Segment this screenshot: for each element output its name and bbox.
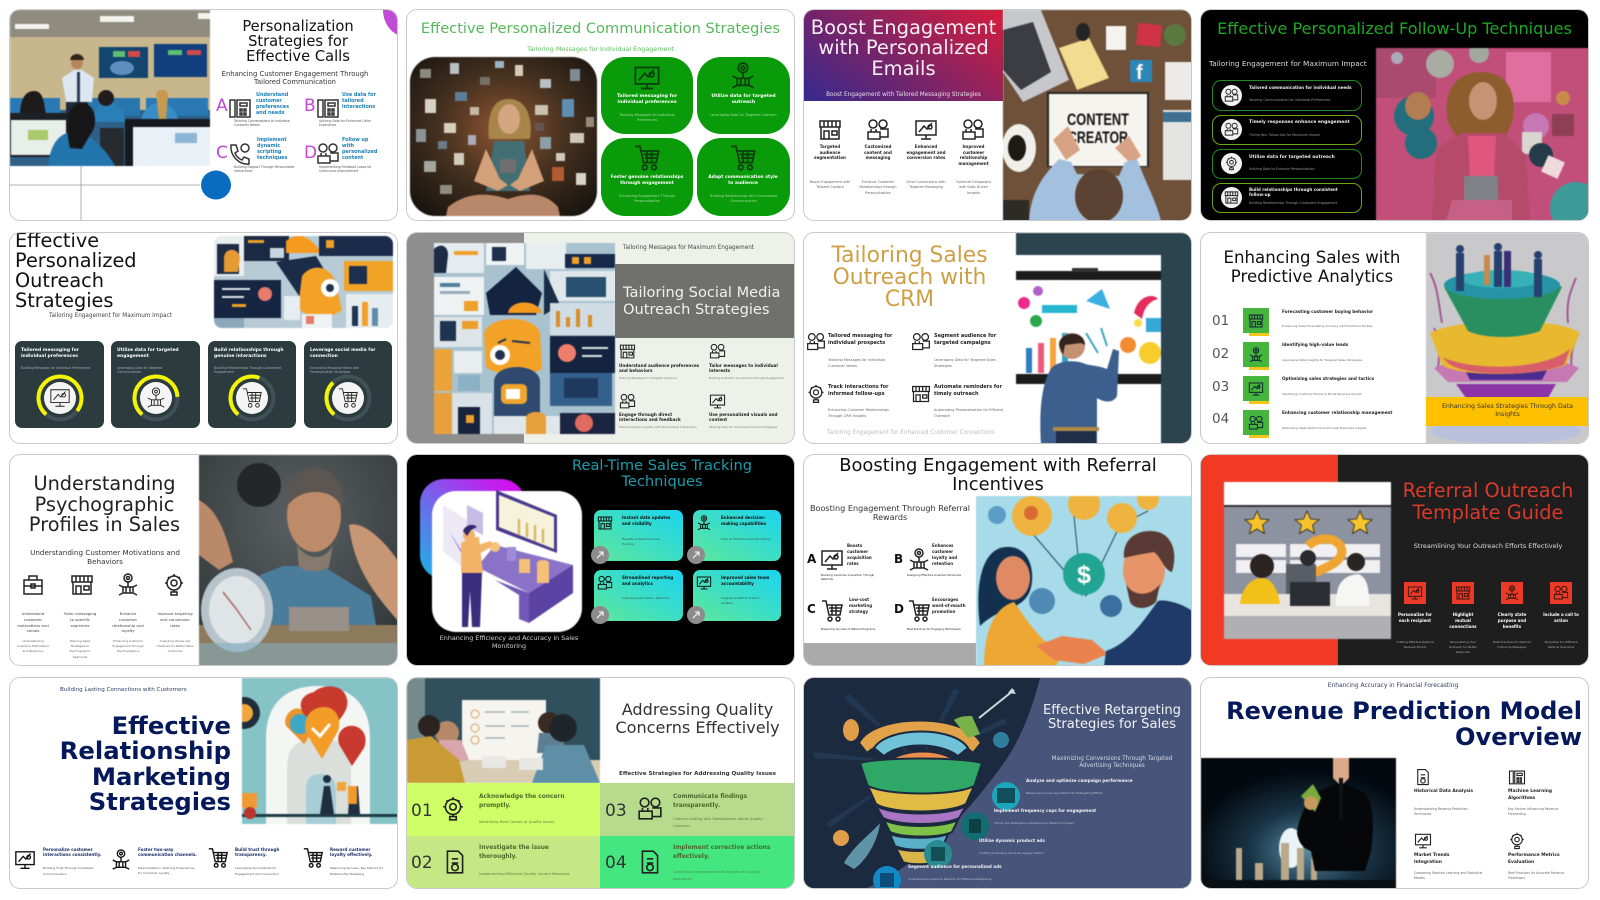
list row 2: Timely responses enhance engagement	[1249, 120, 1350, 125]
bottom items: Building Trust Through Consistent Communication	[43, 866, 94, 876]
list row 3: Utilizing Data to Enhance Personalization	[1249, 167, 1315, 171]
list row 1: Tailored communication for individual needs	[1249, 85, 1352, 90]
title: Referral Outreach Template Guide	[1403, 479, 1573, 524]
red side band	[1201, 455, 1338, 666]
image: layered funnel with people	[1426, 233, 1588, 443]
item grid: Understanding Revenue Prediction Techniques	[1414, 807, 1468, 816]
tile 3	[594, 570, 683, 621]
subtitle: Tailoring Engagement for Maximum Impact	[49, 313, 172, 319]
panel: Tailoring Social Media Outreach Strategies	[407, 233, 794, 443]
tile: utilize data	[697, 57, 790, 134]
metric columns: Enhanced engagement and conversion rates	[906, 144, 946, 160]
panel: Effective Retargeting Strategies for Sales	[804, 678, 1191, 888]
tile 01: Acknowledge the concern promptly.	[479, 794, 565, 809]
panel: Boost Engagement with Personalized Emails	[804, 10, 1191, 220]
tile: foster relationships: Enhancing Engagement Through Personalization	[619, 194, 675, 203]
card: tailored messaging: Tailored messaging for individual preferences	[21, 348, 79, 359]
image: flat collage	[213, 235, 394, 329]
item A: Understand customer preferences and needs	[256, 92, 289, 116]
tile 01: 01	[411, 801, 433, 821]
panel: Boosting Engagement with Referral Incentives	[804, 455, 1191, 665]
items: Automating Personalization for Efficient Outreach	[934, 408, 1003, 418]
items: Enhancing Customer Relationships Through CRM Insights	[828, 408, 889, 418]
image: meeting illustration	[1223, 481, 1392, 640]
tile 1	[594, 510, 683, 561]
image: meeting with whiteboard	[407, 678, 601, 783]
numbered list: Identifying Customer Trends to Boost Revenue Growth	[1282, 392, 1362, 396]
list row 4: Build relationships through consistent follow-up	[1249, 187, 1338, 197]
bottom items: Measuring Success: Key Metrics for Relationship Marketing	[330, 866, 383, 876]
title: Addressing Quality Concerns Effectively	[615, 700, 780, 737]
title: Understanding Psychographic Profiles in Sales	[29, 472, 180, 536]
list: retargeting steps: Segment audience for personalized ads	[908, 864, 1002, 869]
card: utilize data: Utilize data for targeted engagement	[117, 348, 179, 359]
subtitle: Understanding Customer Motivations and Behaviors	[30, 548, 180, 566]
metric columns: Improved customer relationship management	[958, 144, 989, 166]
image: content creator desk: CREATOR	[1068, 128, 1128, 147]
title: Effective Relationship Marketing Strategies	[60, 711, 231, 816]
panel: Referral Outreach Template Guide	[1201, 455, 1588, 665]
header band: Boost Engagement with Personalized Emails	[811, 16, 996, 80]
items	[807, 333, 1004, 418]
item D: Implementing Feedback Loops for Continuous Improvement	[319, 165, 372, 173]
item grid: Comparing Machine Learning and Statistical Models	[1414, 871, 1482, 880]
tile: foster relationships	[601, 138, 693, 216]
numbered list: 01	[1212, 313, 1229, 329]
items: Segment audience for targeted campaigns	[934, 333, 996, 346]
tile 02	[407, 836, 600, 889]
image: handshake illustration: $	[1077, 561, 1091, 589]
items: Boosts customer acquisition rates	[847, 543, 872, 566]
grey side band	[407, 233, 524, 444]
image: man with clock	[198, 455, 397, 665]
columns	[17, 573, 194, 659]
yellow callout	[1426, 397, 1589, 426]
columns: Clearly state purpose and benefits	[1498, 612, 1526, 629]
bottom items: Reward customer loyalty effectively.	[330, 847, 372, 857]
title: Revenue Prediction Model Overview	[1226, 697, 1582, 750]
tile 02: Investigate the issue thoroughly.	[479, 845, 549, 860]
numbered list	[1212, 308, 1392, 438]
columns: Tailor messaging to specific segments	[64, 611, 96, 628]
item C: Implement dynamic scripting techniques	[257, 137, 287, 161]
arrow badges	[591, 546, 705, 624]
tile: adapt style: Building Relationships with Customized Communication	[710, 194, 777, 203]
columns: Best Practices for Referral Follow-Up Messages	[1493, 640, 1531, 649]
item grid: Market Trends Integration	[1414, 853, 1449, 865]
image: map pins and arch	[241, 678, 397, 825]
bottom items: Leveraging Social Media for Engagement and Connection	[235, 866, 279, 876]
image: content creator desk: CONTENT	[1067, 110, 1129, 129]
items: B	[894, 552, 903, 566]
tile 03: 03	[605, 801, 627, 821]
tile: tailored messaging: Tailoring Messages for Individual Preferences	[619, 113, 675, 122]
list row 3: Utilize data for targeted outreach	[1249, 155, 1335, 160]
list row 1: Tailoring Communication for Individual Preferences	[1249, 98, 1330, 102]
tile: tailored messaging	[601, 57, 693, 134]
panel: Effective Relationship Marketing Strategies	[10, 678, 397, 888]
illustration: funnel on dark curve	[804, 678, 1040, 888]
card: tailored messaging	[15, 341, 104, 428]
metric columns: Drive Conversions with Targeted Messaging	[906, 180, 946, 189]
numbered list: Enhancing customer relationship management	[1282, 410, 1392, 415]
items: D	[894, 602, 904, 616]
items: Low-cost marketing strategy	[849, 597, 872, 614]
list: retargeting steps: Timing Your Retargeting Campaigns for Maximum Impact	[994, 821, 1074, 825]
numbered list: 02	[1212, 346, 1229, 362]
columns: Understand customer motivations and values	[17, 611, 49, 633]
subtitle: Tailoring Engagement for Maximum Impact	[1209, 59, 1367, 68]
list: retargeting steps	[908, 778, 1133, 881]
panel: Tailoring Sales Outreach with CRM	[804, 233, 1191, 443]
tile 4	[693, 570, 781, 621]
item C	[216, 137, 294, 173]
item grid: Key Factors Influencing Revenue Forecasting	[1508, 807, 1558, 816]
caption: Enhancing Efficiency and Accuracy in Sales Monitoring	[440, 634, 578, 650]
items: Enhancing Brand Loyalty with Personalized Interactions	[619, 425, 697, 429]
subtitle: Maximizing Conversions Through Targeted Advertising Techniques	[1052, 756, 1172, 769]
image: call center training room	[10, 10, 211, 167]
bottom items: Build trust through transparency.	[235, 847, 279, 857]
item A: Tailoring Conversations to Individual Customer Needs	[234, 119, 290, 127]
title: Effective Personalized Follow-Up Techniques	[1217, 19, 1572, 38]
card: utilize data	[111, 341, 200, 428]
subtitle: Effective Strategies for Addressing Quality Issues	[619, 771, 776, 777]
items: Tailoring Messages for Targeted Audience	[619, 376, 677, 380]
sub heading: Boosting Engagement Through Referral Rewards	[810, 503, 970, 522]
decorative corner and circle	[10, 10, 397, 220]
title: Boosting Engagement with Referral Incentives	[839, 455, 1157, 494]
tile 2: Enhanced decision-making capabilities	[721, 515, 766, 526]
card: build relationships	[208, 341, 296, 428]
title band	[615, 264, 795, 338]
metric columns	[810, 119, 991, 195]
item grid: Best Practices for Accurate Revenue Predictions	[1508, 871, 1564, 880]
panel: Revenue Prediction Model Overview	[1201, 678, 1588, 888]
numbered list: Optimizing Sales Performance through Predictive Insights	[1282, 426, 1367, 430]
image: content creator desk: f	[1136, 62, 1143, 84]
tile 1: Benefits of Real-Time Sales Tracking	[622, 537, 660, 546]
columns: Include a call to action	[1543, 612, 1579, 623]
columns: Improve targeting and conversion rates	[157, 611, 193, 628]
illustration: isometric analyst	[419, 478, 583, 633]
items: Measuring Success of Referral Programs	[821, 627, 875, 631]
tile 03: Communicating with Stakeholders About Quality Concerns	[673, 817, 763, 828]
items: Designing Effective Incentive Structures	[907, 573, 961, 577]
columns: Tailoring Sales Strategies to Psychographic Segments	[70, 639, 90, 659]
item grid: Machine Learning Algorithms	[1508, 789, 1552, 801]
panel: Personalization Strategies for Effective Calls	[10, 10, 397, 220]
subtitle: Tailoring Messages for Individual Engagement	[527, 45, 674, 53]
top line: Building Lasting Connections with Customers	[60, 687, 187, 693]
panel: Understanding Psychographic Profiles in Sales	[10, 455, 397, 665]
panel: Real-Time Sales Tracking Techniques	[407, 455, 794, 665]
metric columns: Enhance Customer Relationships through Personalization	[860, 180, 896, 195]
card: leverage social	[304, 341, 392, 428]
numbered list: Identifying high-value leads	[1282, 342, 1348, 347]
list row 4: Building Relationships Through Consistent Engagement	[1249, 201, 1338, 205]
columns: Enhancing Customer Engagement Through Psychographics	[112, 639, 144, 653]
tile: utilize data: Leveraging Data for Targeted Outreach	[710, 113, 777, 117]
items: Building Authentic Connections Through Engagement	[709, 376, 784, 380]
list row 4	[1212, 183, 1362, 213]
columns: Crafting Effective Referral Request Emails	[1396, 640, 1434, 649]
items: Boosting Customer Acquisition Through Referrals	[821, 573, 874, 581]
title: Effective Personalized Communication Strategies	[421, 20, 780, 37]
tile 02: Implementing Effective Quality Control Measures	[479, 872, 570, 876]
title band: Tailoring Social Media Outreach Strategies	[623, 284, 780, 318]
card: tailored messaging: Building Messages for Individual Preferences	[21, 366, 90, 370]
tile 1: Instant data updates and visibility	[622, 515, 670, 526]
image: flat collage tall	[433, 242, 616, 435]
tile 01: Identifying Root Causes of Quality Issues	[479, 820, 554, 824]
items: C	[807, 602, 816, 616]
items: Understand audience preferences and behaviors	[619, 363, 699, 373]
tile: tailored messaging: Tailored messaging for individual preferences	[617, 94, 677, 105]
columns	[1396, 582, 1579, 654]
item B: B	[304, 96, 316, 116]
columns: Understanding Customer Motivations and Behaviors	[17, 639, 49, 653]
bottom items: Personalize customer interactions consistently.	[43, 847, 102, 857]
title: Effective Retargeting Strategies for Sales	[1043, 703, 1181, 732]
tile: adapt style: Adapt communication style to audience	[708, 175, 778, 186]
list: retargeting steps: Implement frequency caps for engagement	[994, 808, 1096, 813]
numbered list: 04	[1212, 411, 1229, 427]
columns: Personalize for each recipient	[1398, 612, 1432, 623]
item C: Building Rapport Through Personalized Interactions	[234, 165, 294, 173]
tile 03: Communicate findings transparently.	[673, 794, 747, 809]
numbered list: Optimizing sales strategies and tactics	[1282, 376, 1374, 381]
card: leverage social: Enhancing Response Rates with Personalization Strategies	[310, 366, 359, 374]
items: Enhances customer loyalty and retention	[932, 543, 957, 566]
card: leverage social: Leverage social media for connection	[310, 348, 376, 359]
items: Tailored messaging for individual prospects	[828, 333, 892, 346]
image: businessman over city	[1201, 757, 1397, 888]
tile 3: Streamlined reporting and analytics	[622, 575, 673, 586]
list row 1	[1212, 80, 1362, 111]
item A: A	[216, 96, 228, 116]
item A	[216, 92, 290, 127]
tile 2	[693, 510, 781, 561]
tile 02: 02	[411, 853, 433, 873]
list: retargeting steps: Utilize dynamic product ads	[979, 838, 1045, 843]
image: content creator desk	[1002, 10, 1191, 220]
list: retargeting steps: Analyze and optimize campaign performance	[1026, 778, 1133, 783]
item grid	[1414, 769, 1564, 880]
header band	[804, 10, 1003, 101]
subtitle: Streamlining Your Outreach Efforts Effectively	[1414, 542, 1562, 550]
items: Automate reminders for timely outreach	[934, 384, 1002, 397]
top line: Tailoring Messages for Maximum Engagement	[623, 245, 754, 251]
tile 04: Implement corrective actions effectively.	[673, 845, 770, 860]
tile 01	[407, 783, 600, 836]
items: Engage through direct interactions and feedback	[619, 412, 681, 422]
title: Enhancing Sales with Predictive Analytics	[1224, 248, 1400, 286]
list row 2	[1212, 115, 1362, 145]
metric columns: Boost Engagement with Tailored Content	[810, 180, 850, 189]
items: Encourages word-of-mouth promotion	[932, 597, 966, 614]
panel: Addressing Quality Concerns Effectively	[407, 678, 794, 888]
tile 3: Analyzing Sales Data in Real-Time	[622, 596, 669, 600]
card: build relationships: Building Relationships Through Customized Engagement	[214, 366, 281, 374]
item D: D	[304, 143, 317, 163]
list row 3	[1212, 149, 1362, 179]
item grid: Historical Data Analysis	[1414, 789, 1473, 794]
items: Use personalized visuals and content	[709, 412, 778, 422]
columns: Enhance customer relationship and loyalty	[112, 611, 144, 633]
panel: Effective Personalized Outreach Strategies	[10, 233, 397, 443]
item C: C	[216, 143, 228, 163]
item grid: Performance Metrics Evaluation	[1508, 853, 1560, 865]
panel: Effective Personalized Communication Strategies	[407, 10, 794, 220]
yellow callout: Enhancing Sales Strategies Through Data Insights	[1442, 403, 1573, 418]
list: retargeting steps: Crafting Compelling Ads to Re-engage Visitors	[979, 851, 1044, 855]
bottom items	[15, 847, 383, 876]
items	[619, 344, 784, 429]
image: woman in pink room	[1375, 47, 1588, 220]
panel: Enhancing Sales with Predictive Analytics	[1201, 233, 1588, 443]
items: Utilizing Data for Customized Content Strategies	[709, 425, 777, 429]
item D: Follow up with personalized content	[342, 137, 377, 161]
item D	[304, 137, 377, 173]
items: Tailor messages to individual interests	[709, 363, 778, 373]
items: Tailoring Messages for Individual Customer Needs	[828, 358, 885, 368]
metric columns: Optimize Campaigns with Data-Driven Insights	[956, 180, 991, 195]
tile 4: Integrating CRM for Instant Updates	[721, 596, 759, 605]
bottom items: Foster two-way communication channels.	[138, 847, 197, 857]
image: woman surrounded by floating photos	[409, 56, 598, 217]
list: retargeting steps: Understanding Customer Behavior for Effective Retargeting	[908, 877, 991, 881]
numbered list: 03	[1212, 379, 1229, 395]
metric columns: Customized content and messaging	[864, 144, 892, 160]
metric columns: Targeted audience segmentation	[814, 144, 846, 160]
tile 04	[600, 836, 795, 889]
items: Leveraging Data for Targeted Sales Strategies	[934, 358, 996, 368]
header band: Boost Engagement with Tailored Messaging Strategies	[826, 92, 981, 98]
numbered list: Forecasting customer buying behavior	[1282, 309, 1373, 314]
card: utilize data: Leveraging Data for Targeted Communication	[117, 366, 162, 374]
columns: Personalizing Your Outreach for Better Response	[1449, 640, 1477, 654]
tile: utilize data: Utilize data for targeted outreach	[711, 94, 776, 105]
item B: Use data for tailored interactions	[342, 92, 376, 110]
grey footer block	[804, 643, 976, 666]
item B	[304, 92, 376, 127]
panel: Effective Personalized Follow-Up Techniques	[1201, 10, 1588, 220]
tile 4: Improved sales team accountability	[721, 575, 769, 586]
item B: Utilizing Data for Enhanced Caller Experience	[319, 119, 371, 127]
tile 04: Continuous Improvement Strategies for Quality Assurance	[673, 870, 760, 881]
image: handshake illustration	[976, 495, 1191, 665]
title: Real-Time Sales Tracking Techniques	[572, 457, 752, 490]
top line: Enhancing Accuracy in Financial Forecasting	[1328, 683, 1458, 689]
tile: foster relationships: Foster genuine relationships through engagement	[611, 175, 683, 186]
items: Track interactions for informed follow-ups	[828, 384, 888, 397]
list row 2: Timing Your Follow-Ups for Maximum Impact	[1249, 133, 1320, 137]
tile 03	[600, 783, 795, 836]
title: Tailoring Sales Outreach with CRM	[831, 243, 988, 312]
columns: Highlight mutual connections	[1449, 612, 1477, 629]
items: A	[807, 552, 816, 566]
numbered list: Enhancing Sales Forecasting Accuracy with Predictive Models	[1282, 324, 1372, 328]
image: man at whiteboard	[1015, 233, 1191, 443]
items	[807, 543, 966, 631]
card: build relationships: Build relationships through genuine interactions	[214, 348, 284, 359]
columns: Analyzing Values and Lifestyles for Better Sales Outcomes	[156, 639, 194, 653]
tile 04: 04	[605, 853, 627, 873]
footer text: Tailoring Engagement for Enhanced Customer Connections	[827, 430, 995, 436]
title: Personalization Strategies for Effective Calls	[242, 18, 354, 65]
columns: Templates for Different Referral Scenarios	[1544, 640, 1578, 649]
items: Best Practices for Engaging Participants	[907, 627, 961, 631]
tile 2: Tools for Effective Sales Monitoring	[721, 537, 770, 541]
numbered list: Leveraging Data Insights for Targeted Sales Strategies	[1282, 358, 1362, 362]
tile: adapt style	[697, 138, 790, 216]
bottom items: Personalization: Tailoring Experiences for Customer Loyalty	[138, 866, 195, 875]
list: retargeting steps: Measuring Success: Key Metrics for Retargeting Efforts	[1026, 791, 1103, 795]
subtitle: Enhancing Customer Engagement Through Tailored Communication	[222, 70, 368, 86]
